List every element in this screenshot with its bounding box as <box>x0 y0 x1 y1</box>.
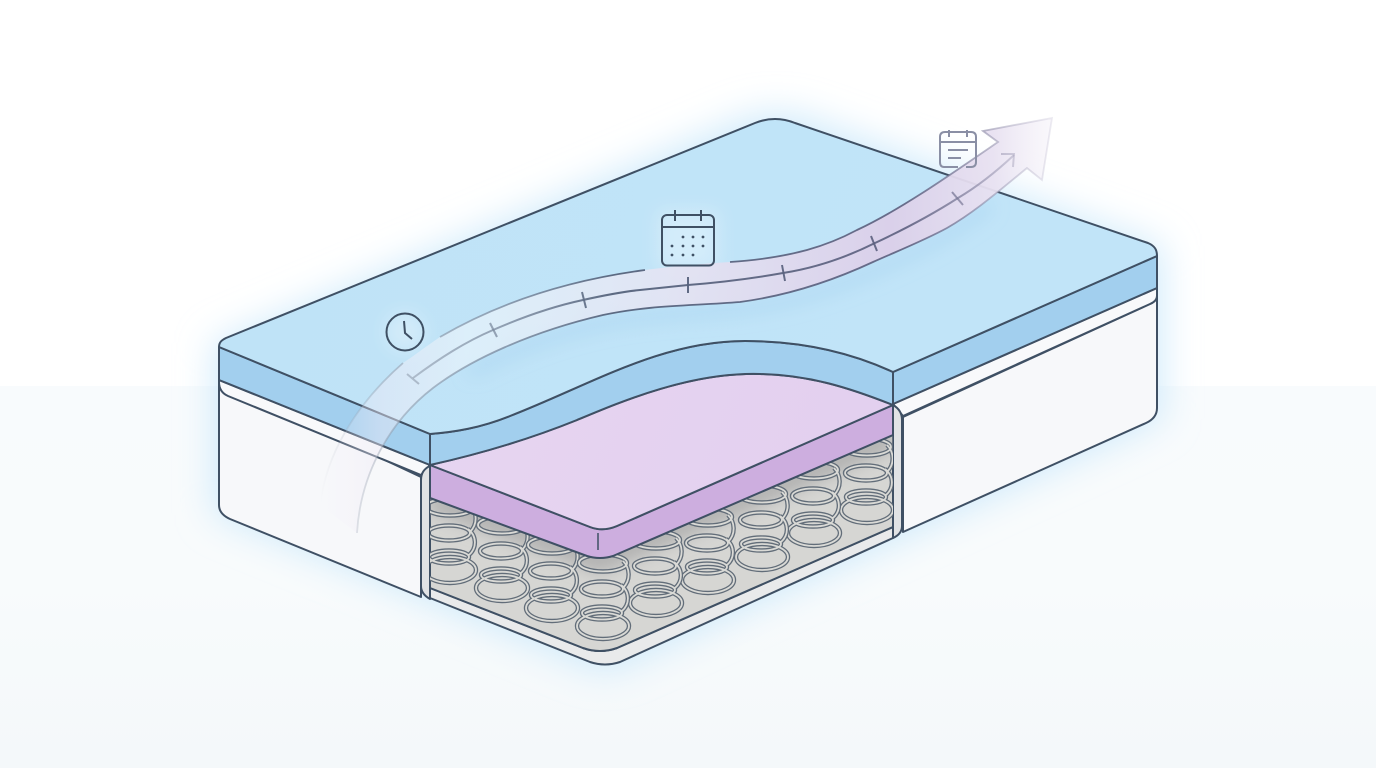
mattress <box>219 119 1157 664</box>
icon: calendar with notes <box>940 130 976 167</box>
icon: calendar <box>662 210 714 266</box>
ribbon body <box>320 118 1052 533</box>
band tick <box>597 533 599 550</box>
lilac layer front band <box>430 405 893 558</box>
blue top surface <box>219 119 1157 434</box>
centre timeline <box>413 155 1014 378</box>
left blue band <box>219 347 430 465</box>
ribbon outline upper middle <box>440 270 645 337</box>
cavity shadow under lilac band <box>430 438 893 562</box>
left cut column <box>421 466 430 599</box>
left comfort strip <box>219 380 430 475</box>
base rim <box>430 527 893 664</box>
time arrow <box>320 118 1052 533</box>
cut blue band <box>430 341 893 465</box>
spring cavity <box>430 435 893 651</box>
mattress glow <box>219 118 1157 665</box>
left side panel <box>219 382 421 597</box>
right side panel <box>903 296 1157 532</box>
ribbon shadow on surface <box>470 205 990 372</box>
timeline ticks <box>407 192 963 384</box>
right comfort strip <box>893 288 1157 416</box>
ribbon outline upper left <box>320 363 403 505</box>
right blue band <box>893 256 1157 404</box>
icon: clock <box>386 314 424 350</box>
icon halos <box>385 211 718 352</box>
springs <box>424 438 893 639</box>
timeline arrowhead <box>1001 154 1014 167</box>
lilac layer top <box>430 374 893 529</box>
right cut column <box>893 405 902 538</box>
ribbon outline upper right and arrowhead <box>357 118 1052 533</box>
